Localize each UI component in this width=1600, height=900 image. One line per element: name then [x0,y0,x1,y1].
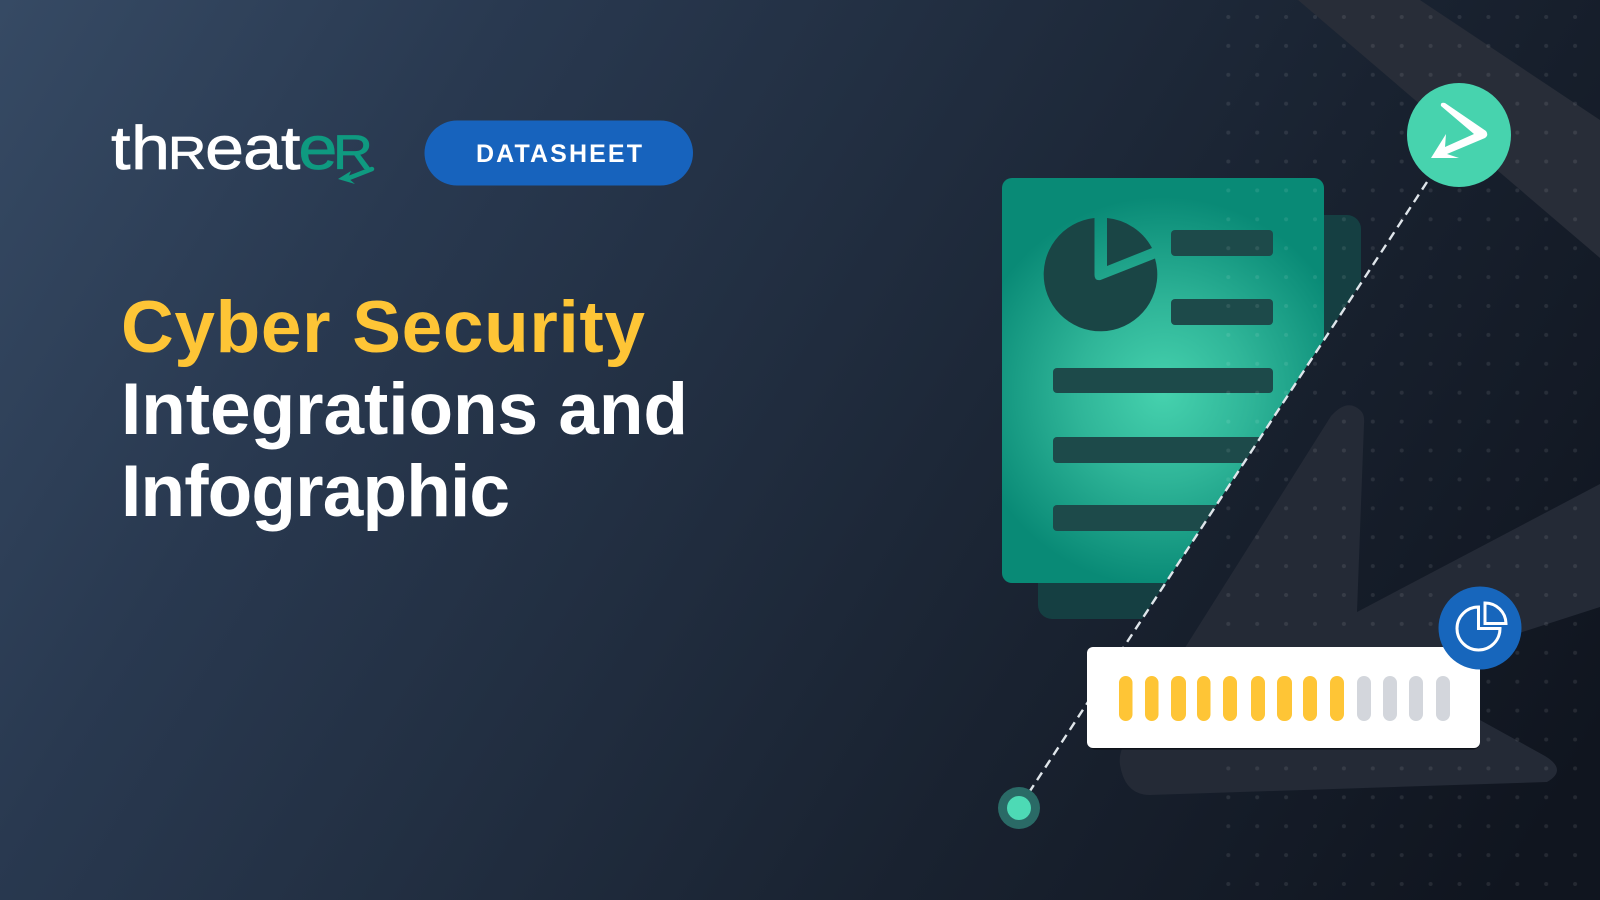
front page [1002,178,1324,583]
back page [1038,215,1361,619]
logo: threater: a [243,113,282,182]
logo: threater: e [298,113,337,182]
icon: start node dot [998,787,1040,829]
badge: datasheet [424,120,693,186]
logo: threater: t [111,113,130,182]
title: Infographic [121,451,510,532]
icon: blue pie chart badge [1438,586,1522,670]
progress card [1087,647,1480,750]
text bars [1053,230,1273,531]
title: Cyber Security [121,287,645,368]
progress ticks: filled [1119,676,1344,721]
title [121,287,688,532]
logo: threater: e [205,113,244,182]
title: Integrations and [121,369,688,450]
logo: threater [111,113,373,184]
icon: pie chart [1044,218,1157,331]
dashed connector line [1028,182,1427,794]
progress ticks: empty [1357,676,1450,721]
background shape: large arrow [1120,405,1600,795]
logo: threater: t [281,113,300,182]
icon: threater arrow badge [1407,83,1511,187]
document illustration [1002,178,1361,619]
badge: datasheet: DATASHEET [476,140,642,168]
logo: threater: R [168,127,206,179]
logo: threater: h [131,113,170,182]
logo: threater: R [333,125,373,179]
background shape: diagonal band [1298,0,1600,258]
